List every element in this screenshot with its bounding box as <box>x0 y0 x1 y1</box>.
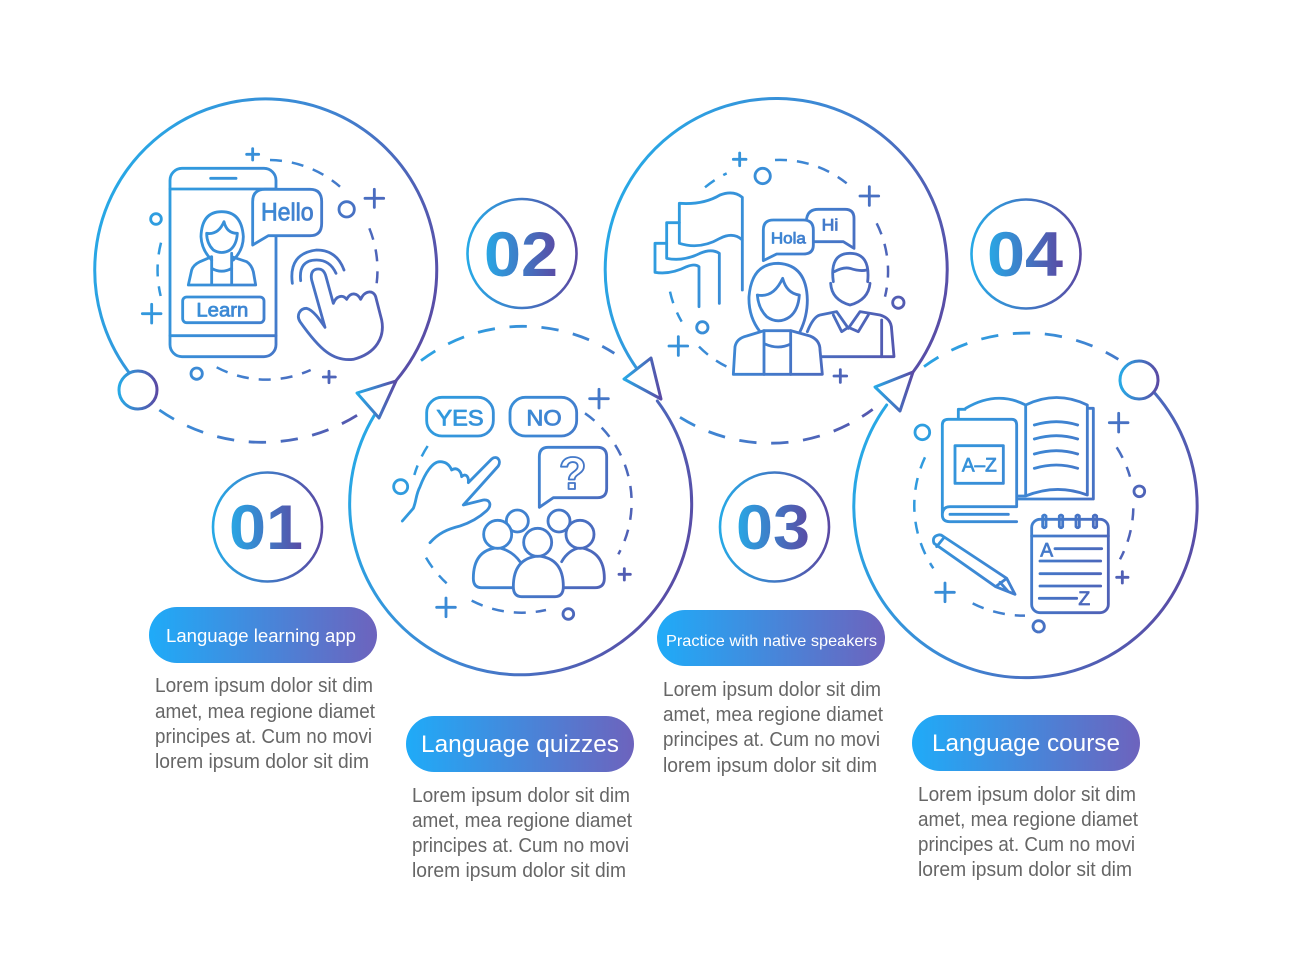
step number 03: 03 <box>736 493 810 563</box>
heading pill: Practice with native speakers <box>657 610 885 666</box>
icon: NO bubble: NO <box>526 405 562 430</box>
node: start circle <box>119 371 157 409</box>
text block 4: amet, mea regione diamet <box>918 808 1138 831</box>
icon: woman <box>733 263 822 374</box>
text block 2: principes at. Cum no movi <box>412 834 629 857</box>
text block 2: Lorem ipsum dolor sit dim <box>412 784 630 807</box>
step number 01 <box>213 472 322 582</box>
solid ring 4 <box>854 393 1197 678</box>
text block 4: lorem ipsum dolor sit dim <box>918 858 1132 881</box>
text block 3: lorem ipsum dolor sit dim <box>663 754 877 777</box>
text block 2: lorem ipsum dolor sit dim <box>412 859 626 882</box>
arrow 2 <box>624 358 661 399</box>
text block 1: amet, mea regione diamet <box>155 700 375 723</box>
icon: spiral notepad: A <box>1040 541 1053 562</box>
heading pill: Language course: Language course <box>932 730 1120 757</box>
heading pill: Language learning app: Language learning app <box>166 626 356 646</box>
icon: woman avatar <box>188 212 256 285</box>
icon: Learn button: Learn <box>196 301 248 322</box>
solid ring 2 <box>350 401 692 675</box>
icon: Hi speech bubble <box>807 209 854 248</box>
decorations: plus signs and dots 2 <box>394 389 630 619</box>
icon: spiral notepad: Z <box>1078 589 1090 610</box>
panel: practice with native speakers circle <box>605 98 947 443</box>
icon: three flags <box>655 193 742 307</box>
icon: Hola speech bubble: Hola <box>771 230 806 247</box>
icon: smartphone <box>170 168 276 357</box>
icon: pencil <box>933 535 1015 594</box>
text block 1: Lorem ipsum dolor sit dim <box>155 674 373 697</box>
icon: man <box>807 253 894 357</box>
decorations: plus signs and dots 1 <box>142 149 384 383</box>
inner dashed orbit 3 <box>670 160 888 367</box>
icon: Hi speech bubble: Hi <box>822 216 838 235</box>
icon: A-Z book <box>942 419 1017 522</box>
icon: Hello speech bubble <box>253 189 322 245</box>
dashed ring 1 <box>159 410 363 442</box>
step number 04 <box>972 200 1080 308</box>
heading pill: Language quizzes <box>406 716 634 772</box>
node: end circle <box>1120 361 1158 399</box>
inner dashed orbit 2 <box>414 413 632 613</box>
icon: A-Z book: A–Z <box>962 456 997 477</box>
icon: group of people <box>473 510 604 597</box>
arrow 1 <box>357 381 396 418</box>
icon: question bubble: ? <box>559 448 587 499</box>
heading pill: Practice with native speakers: Practice with native speakers <box>666 633 877 650</box>
icon: Hello speech bubble: Hello <box>261 199 314 227</box>
heading pill: Language quizzes: Language quizzes <box>421 731 619 758</box>
panel: language quizzes circle <box>350 326 692 675</box>
step number 03 <box>720 472 829 582</box>
panel: language course circle <box>854 333 1197 678</box>
solid ring 1 <box>95 99 437 381</box>
text block 2: amet, mea regione diamet <box>412 809 632 832</box>
arrow 3 <box>875 372 913 411</box>
text block 1: principes at. Cum no movi <box>155 725 372 748</box>
text block 4: Lorem ipsum dolor sit dim <box>918 783 1136 806</box>
text block 3: Lorem ipsum dolor sit dim <box>663 678 881 701</box>
icon: spiral notepad <box>1032 515 1108 613</box>
step number 02: 02 <box>484 220 558 290</box>
text block 1: lorem ipsum dolor sit dim <box>155 750 369 773</box>
text block 3: principes at. Cum no movi <box>663 728 880 751</box>
icon: Learn button <box>183 297 264 323</box>
inner dashed orbit 4 <box>914 447 1133 616</box>
icon: tapping hand <box>292 250 382 360</box>
icon: open book <box>958 397 1093 499</box>
heading pill: Language learning app <box>149 607 377 663</box>
icon: YES bubble: YES <box>436 405 484 430</box>
icon: YES bubble <box>427 397 493 436</box>
heading pill: Language course <box>912 715 1140 771</box>
decorations: plus signs and dots 3 <box>669 153 904 382</box>
panel: language learning app circle <box>95 99 437 442</box>
step number 02 <box>468 199 576 308</box>
solid ring 3 <box>605 98 947 372</box>
icon: question bubble <box>539 447 607 507</box>
step number 04: 04 <box>987 220 1063 290</box>
text block 3: amet, mea regione diamet <box>663 703 883 726</box>
icon: NO bubble <box>510 397 577 436</box>
icon: Hola speech bubble <box>763 220 813 261</box>
icon: pointing hand <box>402 458 499 543</box>
step number 01: 01 <box>229 493 303 563</box>
decorations: plus signs and dots 4 <box>915 413 1145 632</box>
dashed ring 4 <box>924 333 1118 367</box>
text block 4: principes at. Cum no movi <box>918 833 1135 856</box>
inner dashed orbit 1 <box>158 160 377 380</box>
dashed ring 2 <box>421 326 614 361</box>
dashed ring 3 <box>680 409 873 443</box>
